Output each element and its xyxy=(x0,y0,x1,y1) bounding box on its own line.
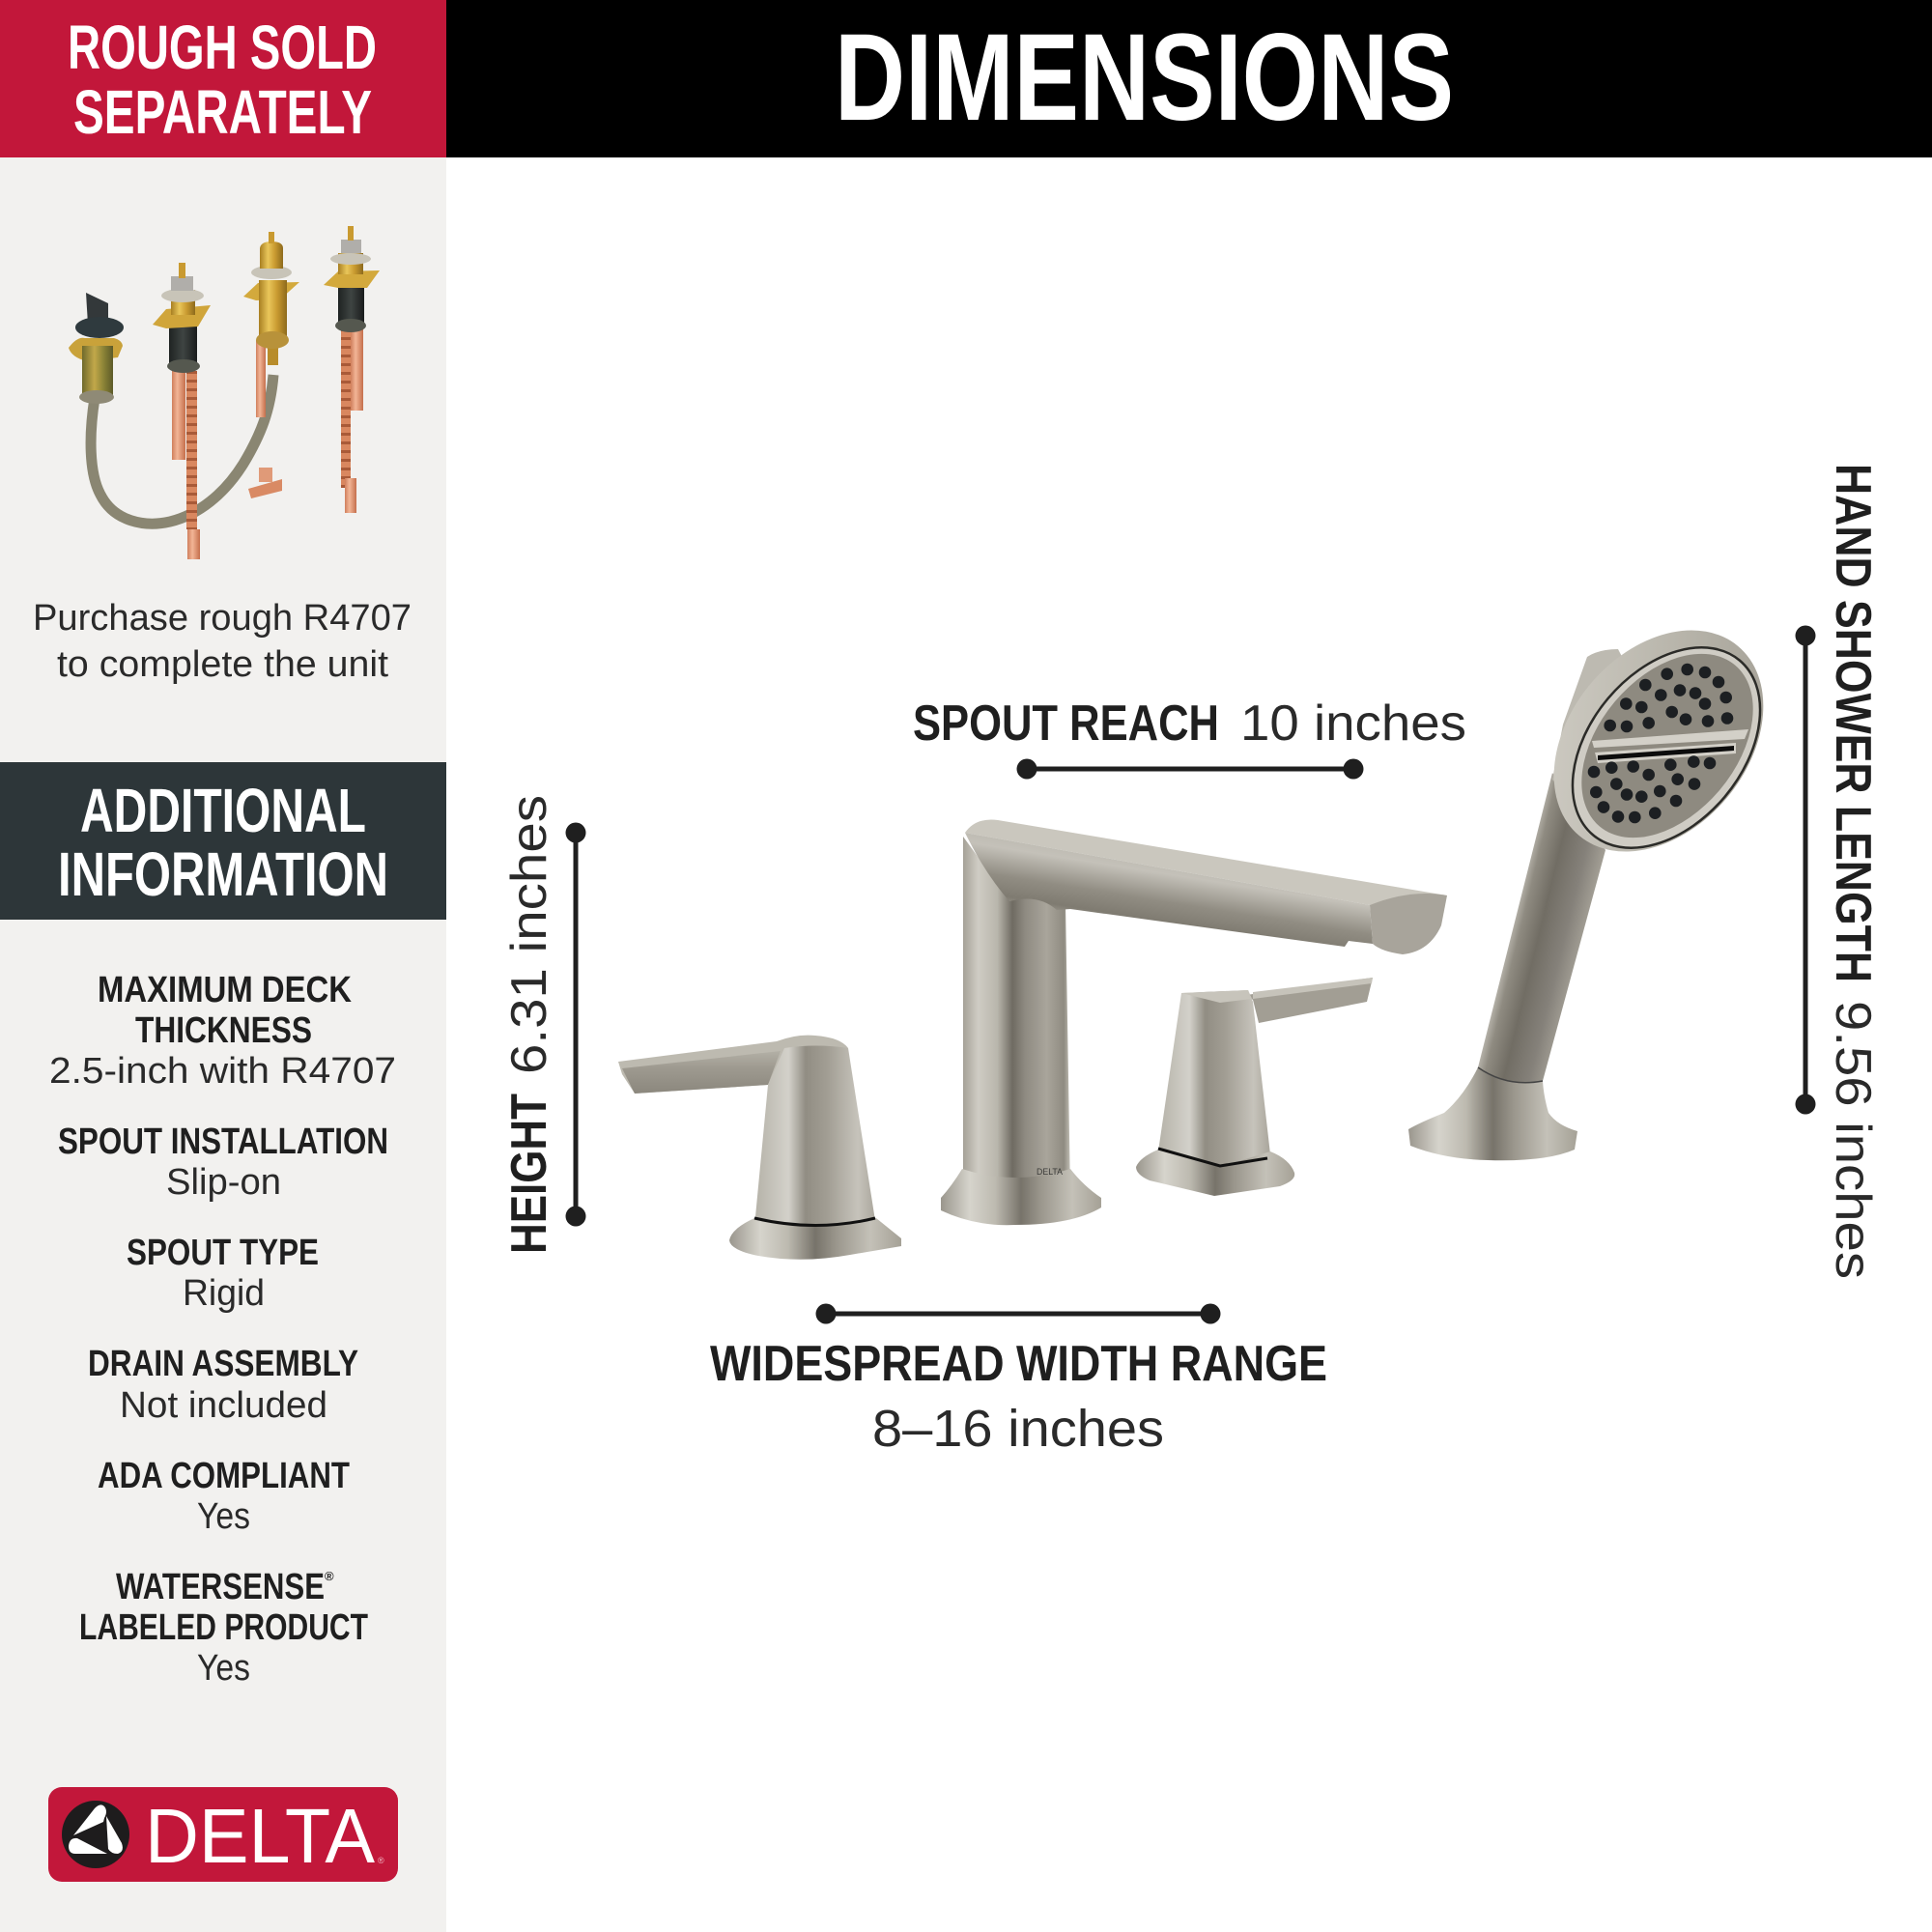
spec: watersense labeled product: LABELED PRODUCT xyxy=(79,1607,368,1648)
header: rough sold separately xyxy=(0,0,446,157)
panel: left sidebar xyxy=(0,157,446,1932)
logo: delta: ® xyxy=(378,1856,384,1865)
dimension: hand shower length xyxy=(1795,464,1881,1279)
spec: drain assembly: DRAIN ASSEMBLY xyxy=(88,1344,358,1384)
left diverter valve xyxy=(69,293,124,404)
spec: spout installation: SPOUT INSTALLATION xyxy=(58,1122,388,1162)
dimension: widespread width range xyxy=(710,1304,1327,1458)
image: rough valve kit xyxy=(69,226,380,559)
spec: ada compliant xyxy=(98,1456,350,1537)
dimension: height: HEIGHT xyxy=(501,1094,557,1254)
hose xyxy=(91,375,273,524)
dimension: height: 6.31 inches xyxy=(501,795,557,1074)
dimension: hand shower length: HAND SHOWER LENGTH xyxy=(1825,464,1881,982)
second valve xyxy=(153,263,211,559)
head face xyxy=(1535,611,1798,884)
spec: spout type: Rigid xyxy=(183,1273,265,1314)
dimension: hand shower length: 9.56 inches xyxy=(1825,1001,1881,1279)
spec: maximum deck thickness: MAXIMUM DECK xyxy=(98,970,352,1010)
spec: watersense labeled product: Yes xyxy=(197,1648,250,1689)
dimension: widespread width range: WIDESPREAD WIDTH RANGE xyxy=(710,1336,1327,1392)
spout column xyxy=(963,837,1070,1193)
header: additional information xyxy=(0,762,446,920)
hand shower handle xyxy=(1478,773,1605,1092)
third valve xyxy=(243,232,299,417)
image: hand shower xyxy=(1408,589,1806,1160)
arrow: width line xyxy=(815,1304,1221,1323)
dimension: spout reach: SPOUT REACH xyxy=(913,696,1219,752)
spec: drain assembly xyxy=(88,1344,358,1426)
icon: delta emblem xyxy=(62,1801,129,1868)
slot xyxy=(1592,729,1748,748)
heading: separately: SEPARATELY xyxy=(73,77,372,147)
copper tee fitting xyxy=(248,468,282,498)
logo: delta: DELTA xyxy=(145,1793,376,1879)
image: left handle xyxy=(618,1036,901,1260)
spec: maximum deck thickness: THICKNESS xyxy=(135,1010,312,1051)
header: additional information: INFORMATION xyxy=(58,839,388,909)
spout base xyxy=(941,1169,1101,1225)
dimension: spout reach xyxy=(913,696,1466,779)
dimension: spout reach: 10 inches xyxy=(1240,696,1466,752)
dimension: height xyxy=(501,795,585,1254)
hand shower base xyxy=(1408,1067,1577,1160)
logo: delta xyxy=(48,1787,398,1882)
spec: spout installation xyxy=(58,1122,388,1203)
spec: maximum deck thickness xyxy=(49,970,396,1092)
text: purchase rough note xyxy=(33,598,412,685)
title: DIMENSIONS xyxy=(835,9,1454,147)
spec: watersense labeled product: WATERSENSE xyxy=(116,1567,325,1607)
arrow: height line xyxy=(566,823,585,1227)
spout arm xyxy=(965,820,1447,905)
arrow: spout reach line xyxy=(1016,759,1364,779)
arrow: hand shower line xyxy=(1795,626,1816,1115)
spec: maximum deck thickness: 2.5-inch with R4707 xyxy=(49,1051,396,1092)
heading: rough sold: ROUGH SOLD xyxy=(68,13,377,82)
fourth valve xyxy=(324,226,380,513)
spec: watersense labeled product: ® xyxy=(325,1569,334,1583)
head back xyxy=(1552,649,1642,811)
spec: spout type: SPOUT TYPE xyxy=(127,1233,319,1273)
spec: spout type xyxy=(127,1233,319,1314)
dimension: widespread width range: 8–16 inches xyxy=(872,1400,1164,1458)
spec: ada compliant: ADA COMPLIANT xyxy=(98,1456,350,1496)
spout end face xyxy=(1370,894,1447,954)
spec: spout installation: Slip-on xyxy=(166,1162,281,1203)
spec: ada compliant: Yes xyxy=(197,1496,250,1537)
spray nozzles xyxy=(1588,664,1733,823)
head rim xyxy=(1511,589,1806,893)
image: right handle xyxy=(1136,978,1373,1196)
text: purchase rough note: to complete the unit xyxy=(57,644,388,685)
header: additional information: ADDITIONAL xyxy=(80,776,366,845)
header: dimensions title xyxy=(446,0,1932,157)
spec: watersense labeled product xyxy=(79,1567,368,1689)
image: center spout xyxy=(941,820,1447,1225)
spec: drain assembly: Not included xyxy=(120,1385,327,1426)
image: center spout: DELTA xyxy=(1037,1167,1064,1178)
text: purchase rough note: Purchase rough R4707 xyxy=(33,598,412,639)
